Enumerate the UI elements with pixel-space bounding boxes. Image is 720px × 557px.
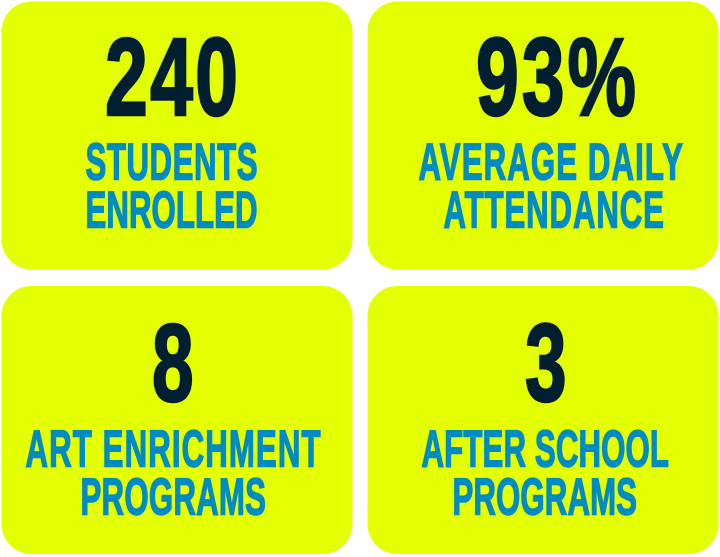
panel: students enrolled	[2, 2, 352, 270]
label: after school programs: AFTER SCHOOL	[422, 420, 669, 478]
label: average daily attendance	[418, 133, 683, 239]
label: after school programs	[422, 420, 669, 526]
panel: art enrichment programs	[2, 286, 352, 554]
number: 93%: 93%	[476, 17, 636, 139]
label: art enrichment programs	[26, 420, 321, 526]
label: after school programs: PROGRAMS	[452, 468, 637, 526]
label: students enrolled	[86, 133, 258, 239]
label: students enrolled: STUDENTS	[86, 133, 258, 191]
label: average daily attendance: ATTENDANCE	[444, 181, 664, 239]
number: 240: 240	[105, 17, 238, 139]
number: 3: 3	[525, 302, 567, 424]
panel: average daily attendance	[368, 2, 718, 270]
label: art enrichment programs: PROGRAMS	[80, 468, 266, 526]
label: students enrolled: ENROLLED	[86, 181, 258, 239]
panel: after school programs	[368, 286, 718, 554]
number: 8: 8	[152, 302, 194, 424]
label: art enrichment programs: ART ENRICHMENT	[26, 420, 321, 478]
label: average daily attendance: AVERAGE DAILY	[418, 133, 683, 191]
